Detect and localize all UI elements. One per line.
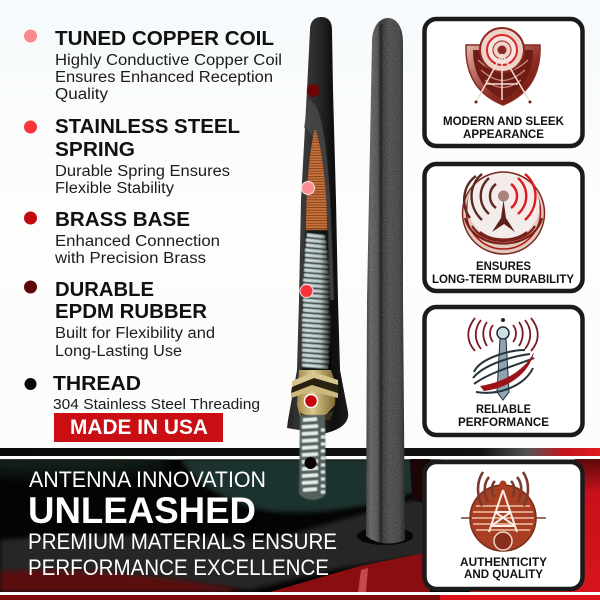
cut reflection [304,100,334,300]
marker: copper coil [302,182,314,194]
label: authenticity and quality [460,557,547,581]
steel spring [301,230,331,372]
text: rubber description: Long-Lasting Use [55,343,182,360]
text: thread description: 304 Stainless Steel Threading [53,397,260,413]
text: spring description: Flexible Stability [55,180,174,197]
threaded stud [299,415,326,500]
text: brass description [54,233,220,267]
label: ensures long-term durability: ENSURES [476,261,531,273]
heading: stainless steel spring: STAINLESS STEEL [55,115,240,138]
card: authenticity and quality [424,462,582,589]
item: thread [24,372,260,413]
marker: spring [300,284,313,298]
text: coil description: Ensures Enhanced Reception [55,69,273,86]
label: reliable performance: PERFORMANCE [458,417,549,429]
label: modern and sleek appearance: MODERN AND SLEEK [443,116,565,128]
icon: shield with antenna [466,28,540,105]
heading: durable epdm rubber: DURABLE [55,278,154,301]
marker: epdm rubber [307,84,320,97]
icon: tower with swooshes [468,318,538,400]
bullet: dark red [24,280,37,294]
label: modern and sleek appearance [443,116,565,141]
badge: made in usa [54,413,223,442]
label: ensures long-term durability: LONG-TERM DURABILITY [432,274,574,286]
text: brass description: Enhanced Connection [55,233,220,250]
text: coil description: Highly Conductive Copper Coil [55,52,282,69]
brass base [291,370,338,420]
label: reliable performance: RELIABLE [476,404,531,416]
heading: durable epdm rubber: EPDM RUBBER [55,300,207,323]
label: authenticity and quality: AUTHENTICITY [460,557,547,569]
banner headline [28,467,337,580]
item: brass base [24,208,220,267]
text: coil description: Quality [55,86,108,103]
label: authenticity and quality: AND QUALITY [464,569,543,581]
page background [0,0,600,448]
text: rubber description [55,325,215,360]
text: spring description: Durable Spring Ensures [55,163,230,180]
text: brass description: with Precision Brass [54,250,206,267]
copper coil [306,129,327,232]
text: coil description [55,52,282,103]
line: premium materials ensure: PREMIUM MATERIALS ENSURE [28,529,337,554]
bullet: black [24,378,36,390]
line: unleashed: UNLEASHED [28,489,256,531]
antenna exterior rod [366,18,405,544]
rubber body [287,17,348,434]
heading: brass base: BRASS BASE [55,208,190,231]
icon: emblem tower [461,472,546,551]
label: ensures long-term durability [432,261,574,286]
line: performance excellence: PERFORMANCE EXCELLENCE [28,555,329,580]
card: reliable performance [424,307,582,435]
text: spring description [55,163,230,197]
marker: thread [304,457,316,469]
marker: brass [304,394,318,408]
label: modern and sleek appearance: APPEARANCE [463,129,544,141]
text: rubber description: Built for Flexibility and [55,325,215,342]
heading: stainless steel spring [55,115,240,161]
heading: tuned copper coil: TUNED COPPER COIL [55,27,274,50]
item: tuned copper coil [24,27,282,103]
heading: stainless steel spring: SPRING [55,138,135,161]
antenna cutaway [287,17,348,500]
bullet: crimson [24,212,37,224]
item: stainless steel spring [24,115,240,197]
card: ensures long-term durability [424,164,582,291]
card: modern and sleek appearance [424,19,582,146]
heading: thread: THREAD [53,372,141,395]
heading: durable epdm rubber [55,278,207,323]
badge: made in usa: MADE IN USA [70,415,208,439]
bullet: red [24,120,37,134]
bottom banner background [0,448,600,600]
label: reliable performance [458,404,549,429]
line: antenna innovation: ANTENNA INNOVATION [29,467,266,492]
item: durable epdm rubber [24,278,215,360]
icon: round signal tower [462,172,544,254]
bullet: pink [24,30,37,42]
